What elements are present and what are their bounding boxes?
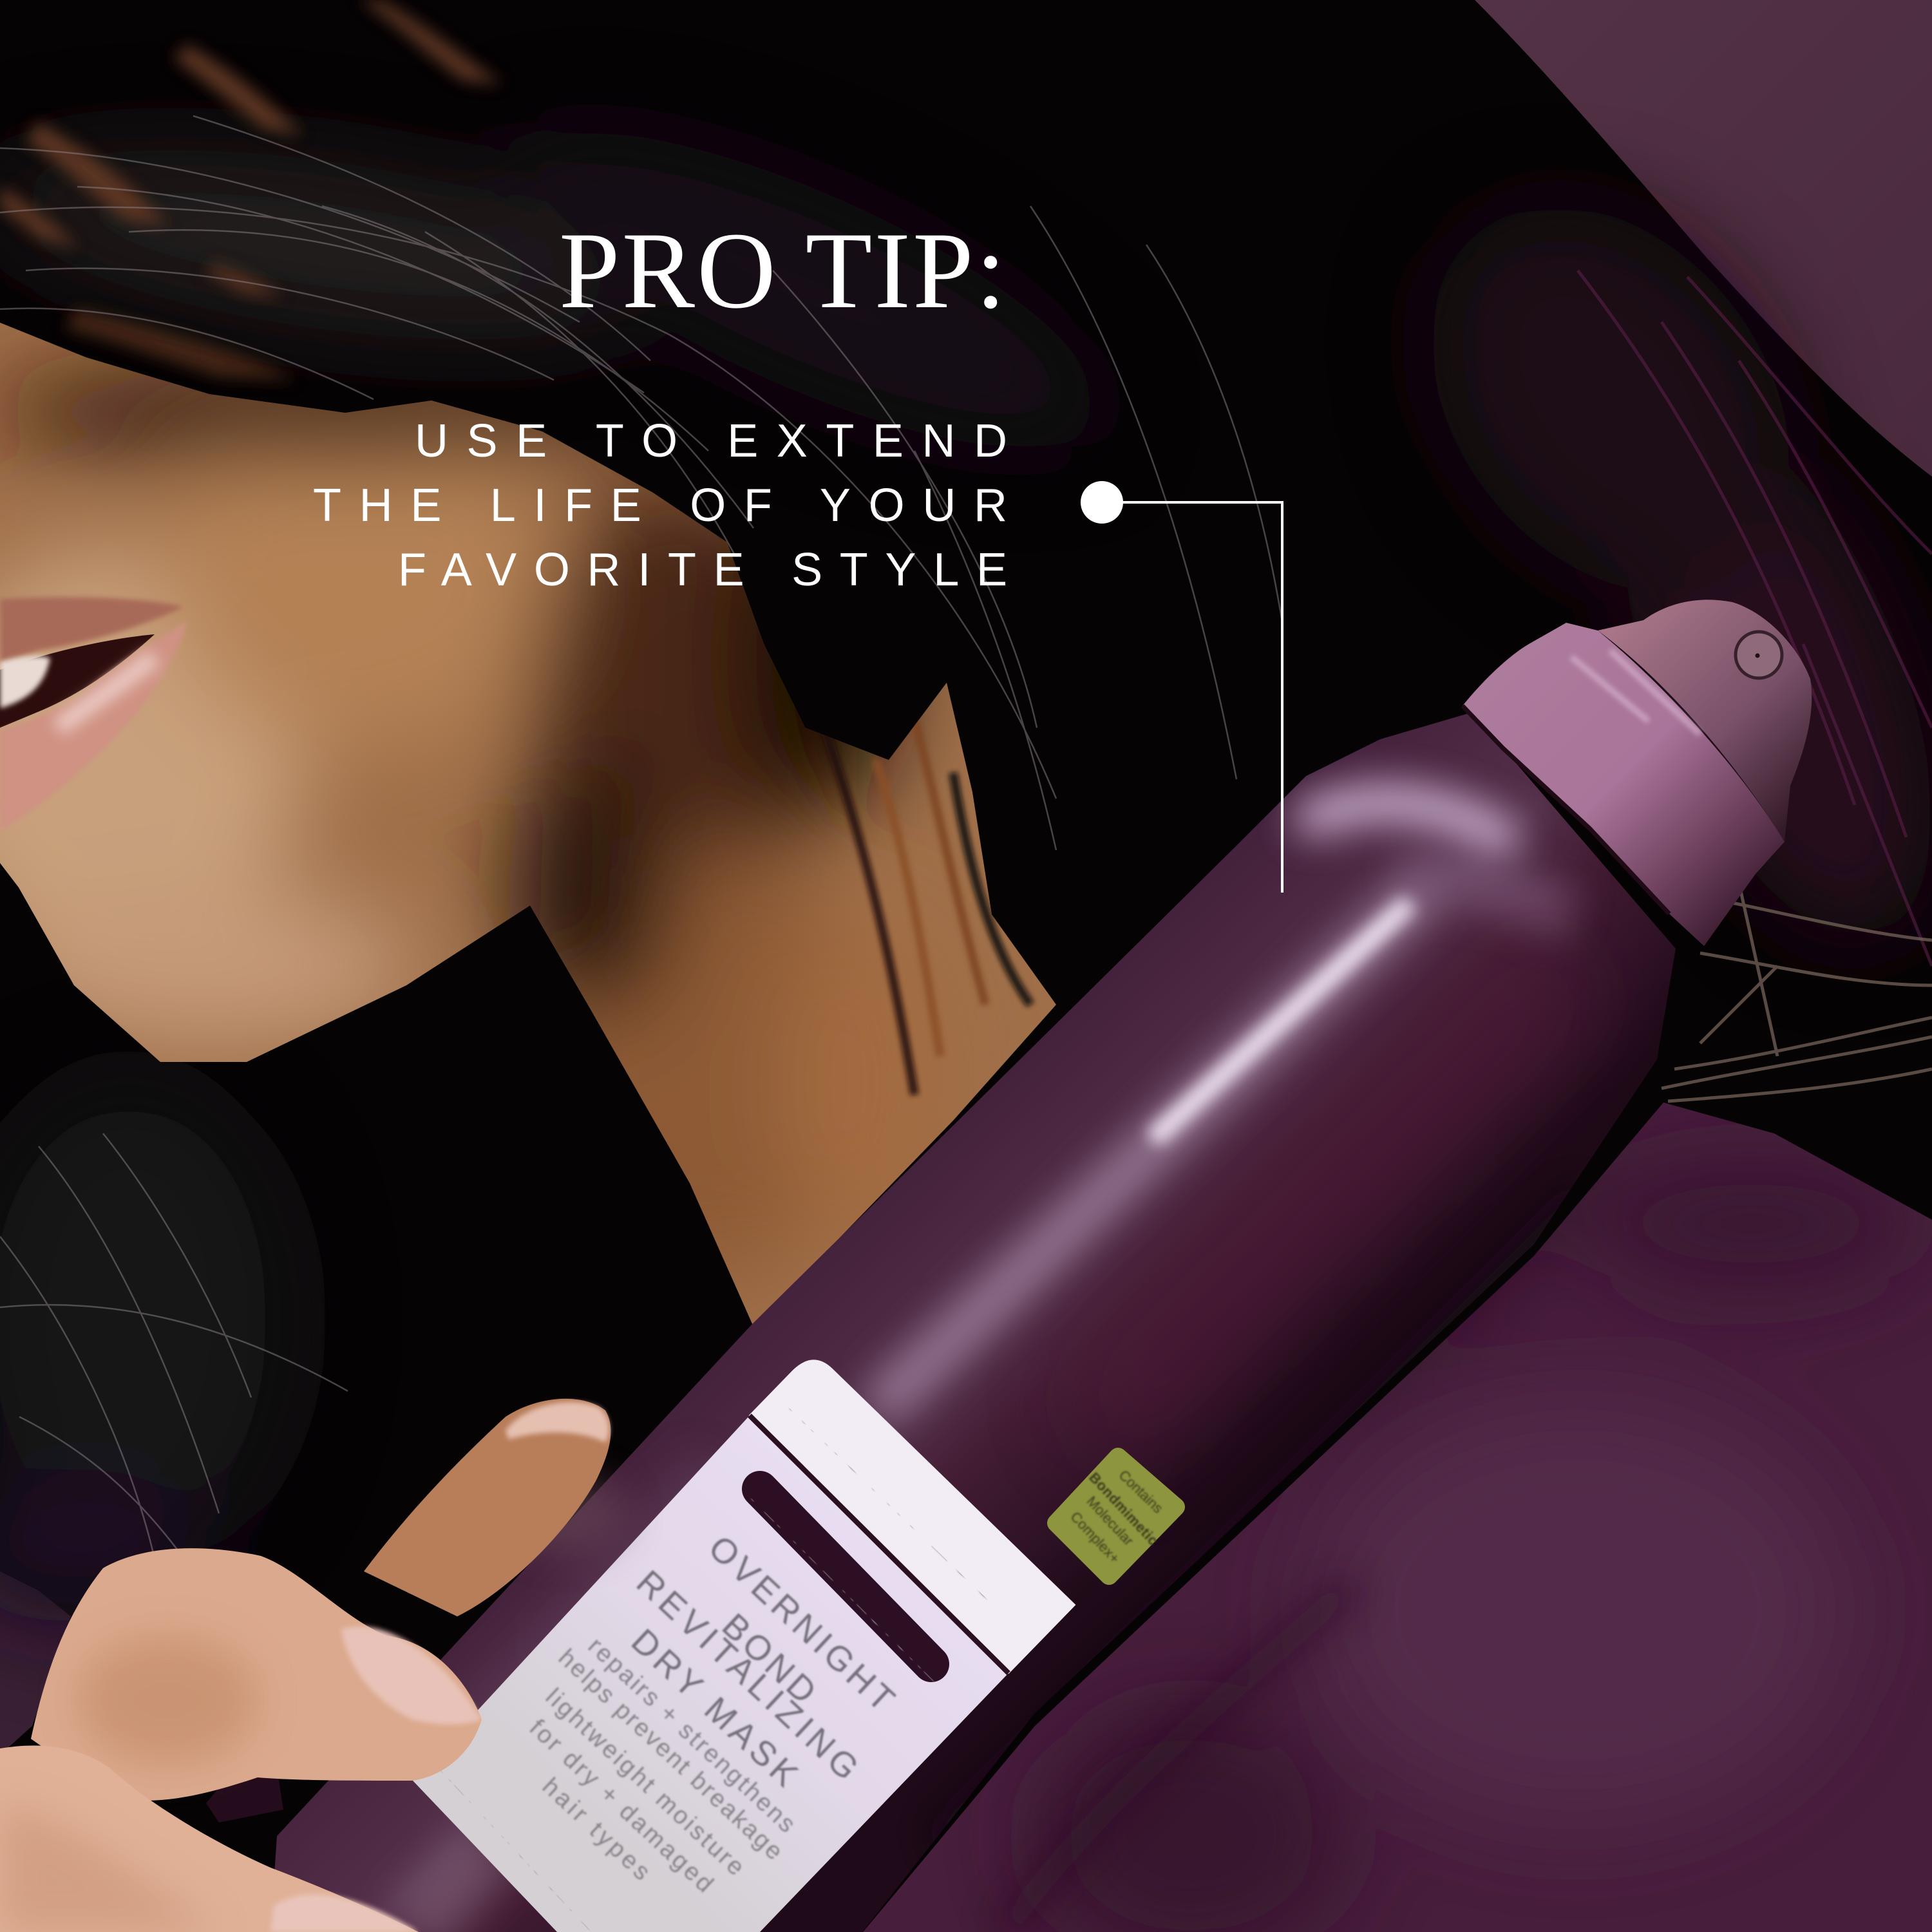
index nail [506, 1402, 609, 1443]
lower lip [0, 621, 187, 831]
tip text: FAVORITE STYLE [398, 544, 1007, 596]
bottle body [270, 712, 1676, 1932]
face and neck skin [0, 290, 1095, 1352]
lower finger [0, 1745, 419, 1932]
product name: BOND [715, 1606, 824, 1711]
tip text: THE LIFE OF YOUR [313, 480, 1007, 531]
teeth [0, 656, 50, 708]
badge text: Complex+ [1067, 1508, 1123, 1567]
shirt fabric [837, 1095, 1932, 1932]
product name: DRY MASK [624, 1622, 805, 1794]
lip gloss [58, 657, 155, 728]
cap shadow line [1463, 706, 1669, 914]
product description: for dry + damaged [524, 1714, 718, 1898]
skin base [0, 290, 1095, 1352]
brown streaks [0, 0, 502, 380]
badge text [1067, 1467, 1166, 1567]
label upper band [750, 1360, 1075, 1673]
shirt fold [1005, 1584, 1352, 1932]
badge text: Contains [1116, 1467, 1166, 1517]
bottle highlights [412, 802, 1610, 1932]
badge square [1056, 1457, 1176, 1576]
middle nail [341, 1627, 482, 1725]
fine strands [0, 116, 1282, 1571]
spray nozzle [1736, 632, 1782, 678]
pill: peptide restore: PEPTIDE RESTORE [746, 1482, 950, 1686]
brand name: KRISTIN ESS+ [781, 1380, 1036, 1629]
green badge [1056, 1457, 1176, 1576]
badge text: Molecular [1083, 1493, 1137, 1549]
product description: hair types [537, 1773, 656, 1886]
lower nail [270, 1894, 419, 1932]
lips [0, 597, 187, 831]
product label [413, 1360, 1075, 1932]
middle finger [31, 1548, 482, 1801]
callout dot and leader line [1081, 481, 1282, 893]
product description: repairs + strengthens [583, 1633, 800, 1838]
product name: OVERNIGHT [701, 1528, 902, 1719]
grey brown lower right strands [1662, 882, 1932, 1101]
shirt [837, 1095, 1932, 1932]
product name: REVITALIZING [629, 1563, 866, 1788]
hand holding the bottle [0, 1399, 625, 1932]
cap dome [1598, 600, 1812, 842]
cap skirt [1463, 623, 1785, 946]
hair lit strands over neck [824, 696, 1030, 1095]
mouth interior [0, 634, 155, 728]
backdrop bottom left [0, 1571, 71, 1755]
label lower panel [413, 1416, 1009, 1932]
upper lip [0, 597, 184, 663]
cap highlights [1571, 650, 1700, 734]
bottle: aerosol can [270, 600, 1812, 1932]
tip text: USE TO EXTEND [415, 415, 1007, 467]
shadow of index fingertip [509, 1475, 625, 1552]
product description: lightweight moisture [540, 1683, 750, 1881]
purple right strands [1578, 270, 1932, 966]
skin tone modelling [0, 367, 947, 1282]
index finger [364, 1399, 611, 1616]
lower finger shading [0, 1803, 219, 1932]
title: PRO TIP: [559, 210, 1006, 331]
shirt shading [1037, 1104, 1919, 1932]
label divider [750, 1416, 1009, 1673]
middle finger shading [77, 1636, 258, 1765]
backdrop top right [1475, 0, 1932, 477]
badge text: Bondmimetic [1086, 1469, 1162, 1548]
dark gap between fingers [206, 1726, 283, 1823]
product description: helps prevent breakage [553, 1644, 788, 1866]
tip text [313, 415, 1007, 596]
